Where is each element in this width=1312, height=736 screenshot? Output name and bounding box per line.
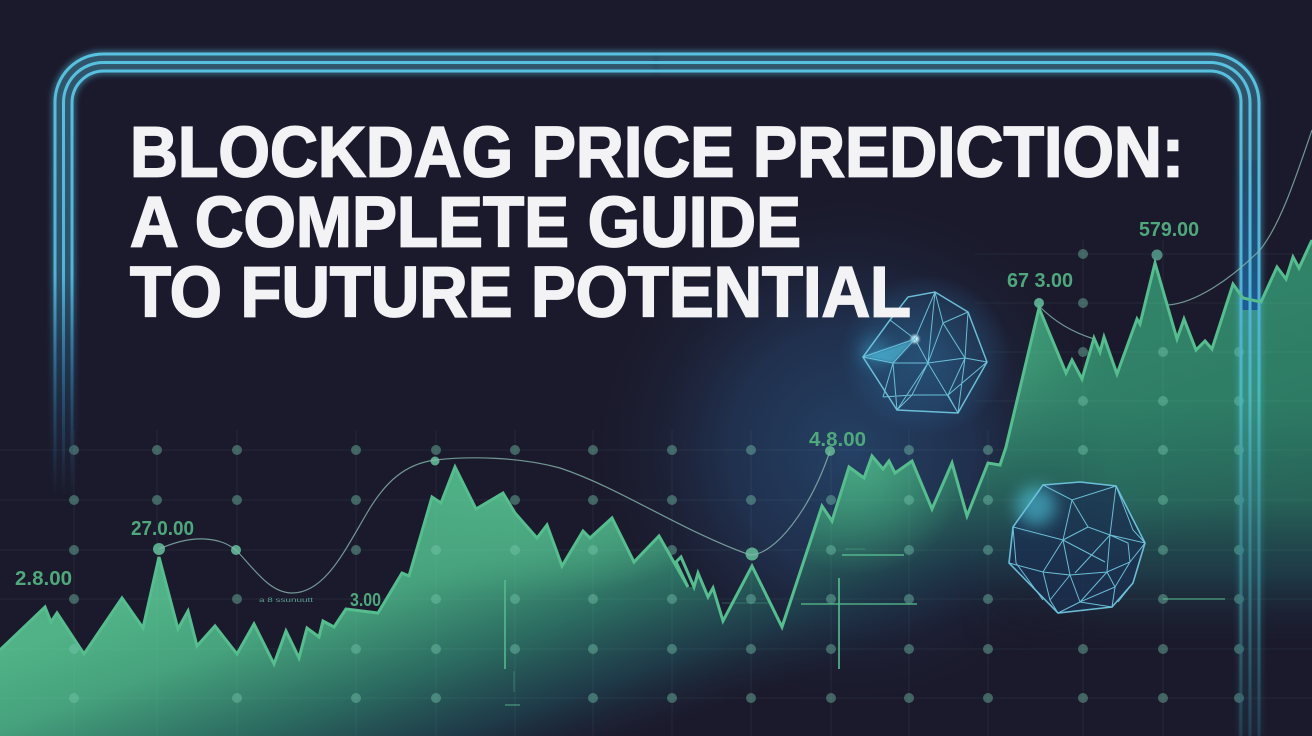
title line 1: BLOCKDAG PRICE PREDICTION:: [130, 112, 1184, 192]
price labels: [15, 219, 1199, 610]
chart grid lines: [0, 240, 1312, 736]
label: 579.00: 579.00: [1139, 219, 1199, 241]
label: tiny caption: a 8 ssunuutt: [259, 598, 314, 604]
icon: lower wireframe polyhedron: [1009, 482, 1145, 613]
chart accent lines and crosshair: [505, 549, 1225, 705]
title line 2: A COMPLETE GUIDE: [130, 182, 801, 262]
label: 28.00: 2.8.00: [15, 568, 72, 590]
chart grid dots: [74, 254, 1239, 698]
panel: price chart area fill: [0, 244, 1312, 736]
title line 3: TO FUTURE POTENTIAL: [130, 252, 911, 332]
label: 27.00: 27.0.00: [131, 518, 194, 540]
title: [130, 112, 1184, 332]
label: 67 3.00: 67 3.00: [1007, 270, 1073, 292]
price trend curves: [159, 130, 1312, 593]
label: 4.8.00: 4.8.00: [809, 429, 866, 451]
chart data point markers: [153, 250, 1162, 560]
label: 3.00: 3.00: [350, 590, 381, 610]
icon: upper wireframe polyhedron: [840, 275, 1010, 435]
price line: [0, 240, 1312, 664]
